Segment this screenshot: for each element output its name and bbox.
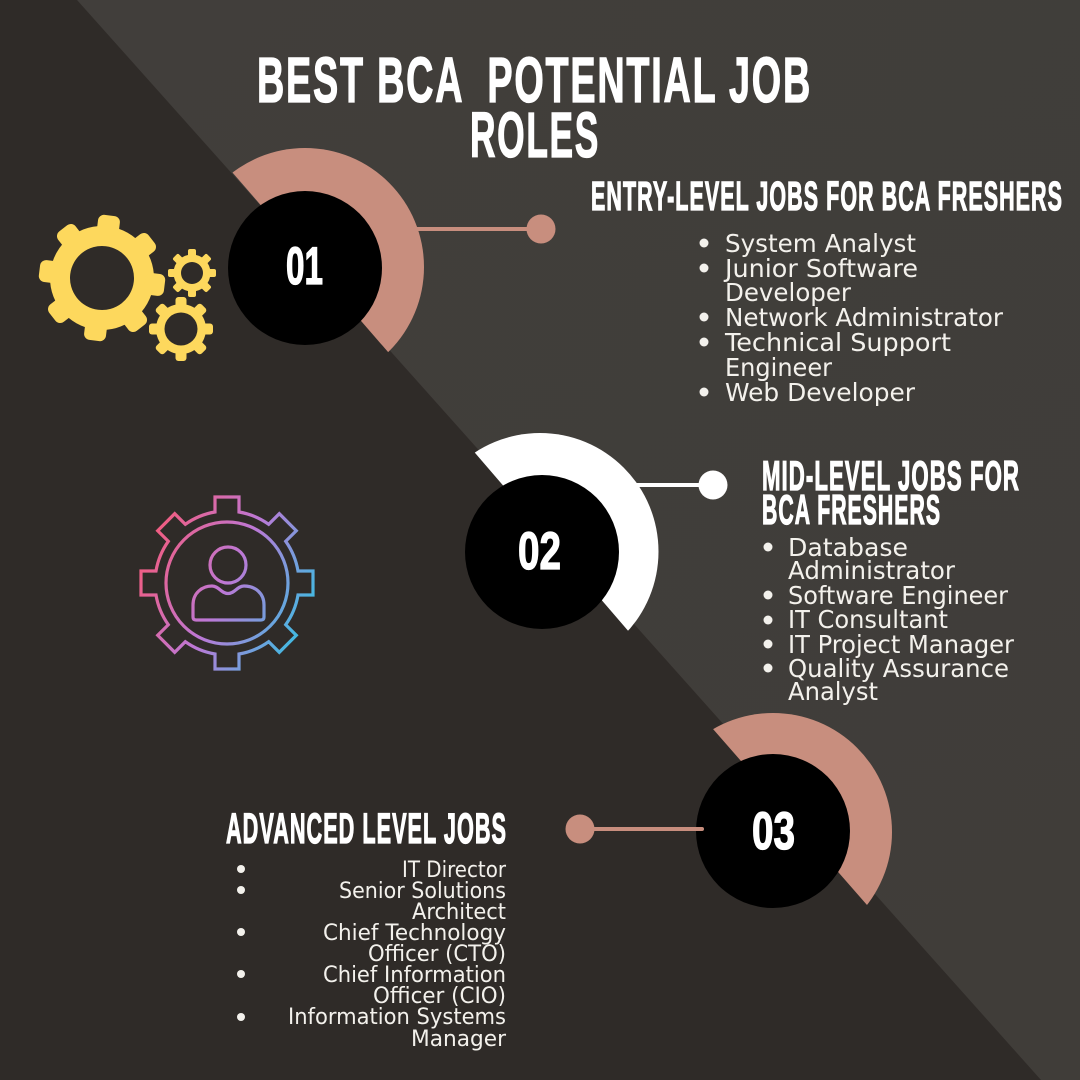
arc 03 (713, 713, 892, 905)
list: entry-level roles (700, 229, 1004, 407)
icon: small gear bottom (149, 297, 213, 361)
icon: large gear (32, 208, 172, 348)
icon: yellow gears (32, 208, 216, 361)
list: entry-level roles: Network Administrator (725, 303, 1004, 332)
number badge 01: 01 (286, 237, 323, 296)
number badge 01 (228, 191, 382, 345)
list: advanced roles: Architect (412, 900, 506, 925)
list: advanced roles: Officer (CIO) (373, 984, 506, 1009)
list: entry-level roles: Technical Support (724, 328, 951, 357)
connector 03 (566, 814, 702, 844)
list: mid-level roles: Software Engineer (788, 581, 1009, 610)
list: mid-level roles: Analyst (788, 677, 878, 706)
title (257, 44, 812, 171)
step 01 (228, 148, 556, 352)
list: advanced roles: IT Director (402, 858, 507, 883)
list: entry-level roles: Engineer (725, 353, 833, 382)
heading: mid-level (762, 452, 1020, 533)
list: advanced roles: Information Systems (288, 1005, 506, 1030)
number badge 02: 02 (518, 522, 561, 581)
list: mid-level roles: IT Project Manager (788, 630, 1015, 659)
list: entry-level roles: Developer (725, 278, 852, 307)
text block: mid-level jobs (762, 452, 1020, 706)
list: entry-level roles: Web Developer (725, 378, 916, 407)
title: ROLES (470, 99, 600, 171)
text block: entry-level jobs (591, 173, 1063, 407)
arc 01 (232, 148, 424, 352)
step 02 (465, 433, 728, 631)
list: mid-level roles: Database (788, 533, 908, 562)
list: advanced roles (237, 858, 507, 1052)
heading: advanced level: ADVANCED LEVEL JOBS (226, 805, 507, 853)
step 03 (566, 713, 892, 908)
number badge 03: 03 (752, 802, 795, 861)
list: advanced roles: Chief Technology (323, 921, 506, 946)
icon: gear with person outline (141, 497, 313, 669)
list: entry-level roles: Junior Software (723, 254, 918, 283)
text block: advanced level jobs (226, 805, 507, 1052)
list: entry-level roles: System Analyst (725, 229, 916, 258)
connector 01 (410, 214, 556, 244)
list: mid-level roles: IT Consultant (788, 605, 948, 634)
list: advanced roles: Officer (CTO) (368, 942, 506, 967)
connector 02 (630, 470, 728, 500)
list: advanced roles: Senior Solutions (339, 879, 506, 904)
arc 02 (474, 433, 658, 631)
list: mid-level roles: Quality Assurance (788, 654, 1009, 683)
number badge 02 (465, 475, 619, 629)
list: mid-level roles (764, 533, 1015, 706)
number badge 03 (696, 754, 850, 908)
icon: small gear top (168, 249, 216, 297)
list: advanced roles: Manager (411, 1027, 507, 1052)
list: advanced roles: Chief Information (323, 963, 506, 988)
list: mid-level roles: Administrator (788, 556, 956, 585)
